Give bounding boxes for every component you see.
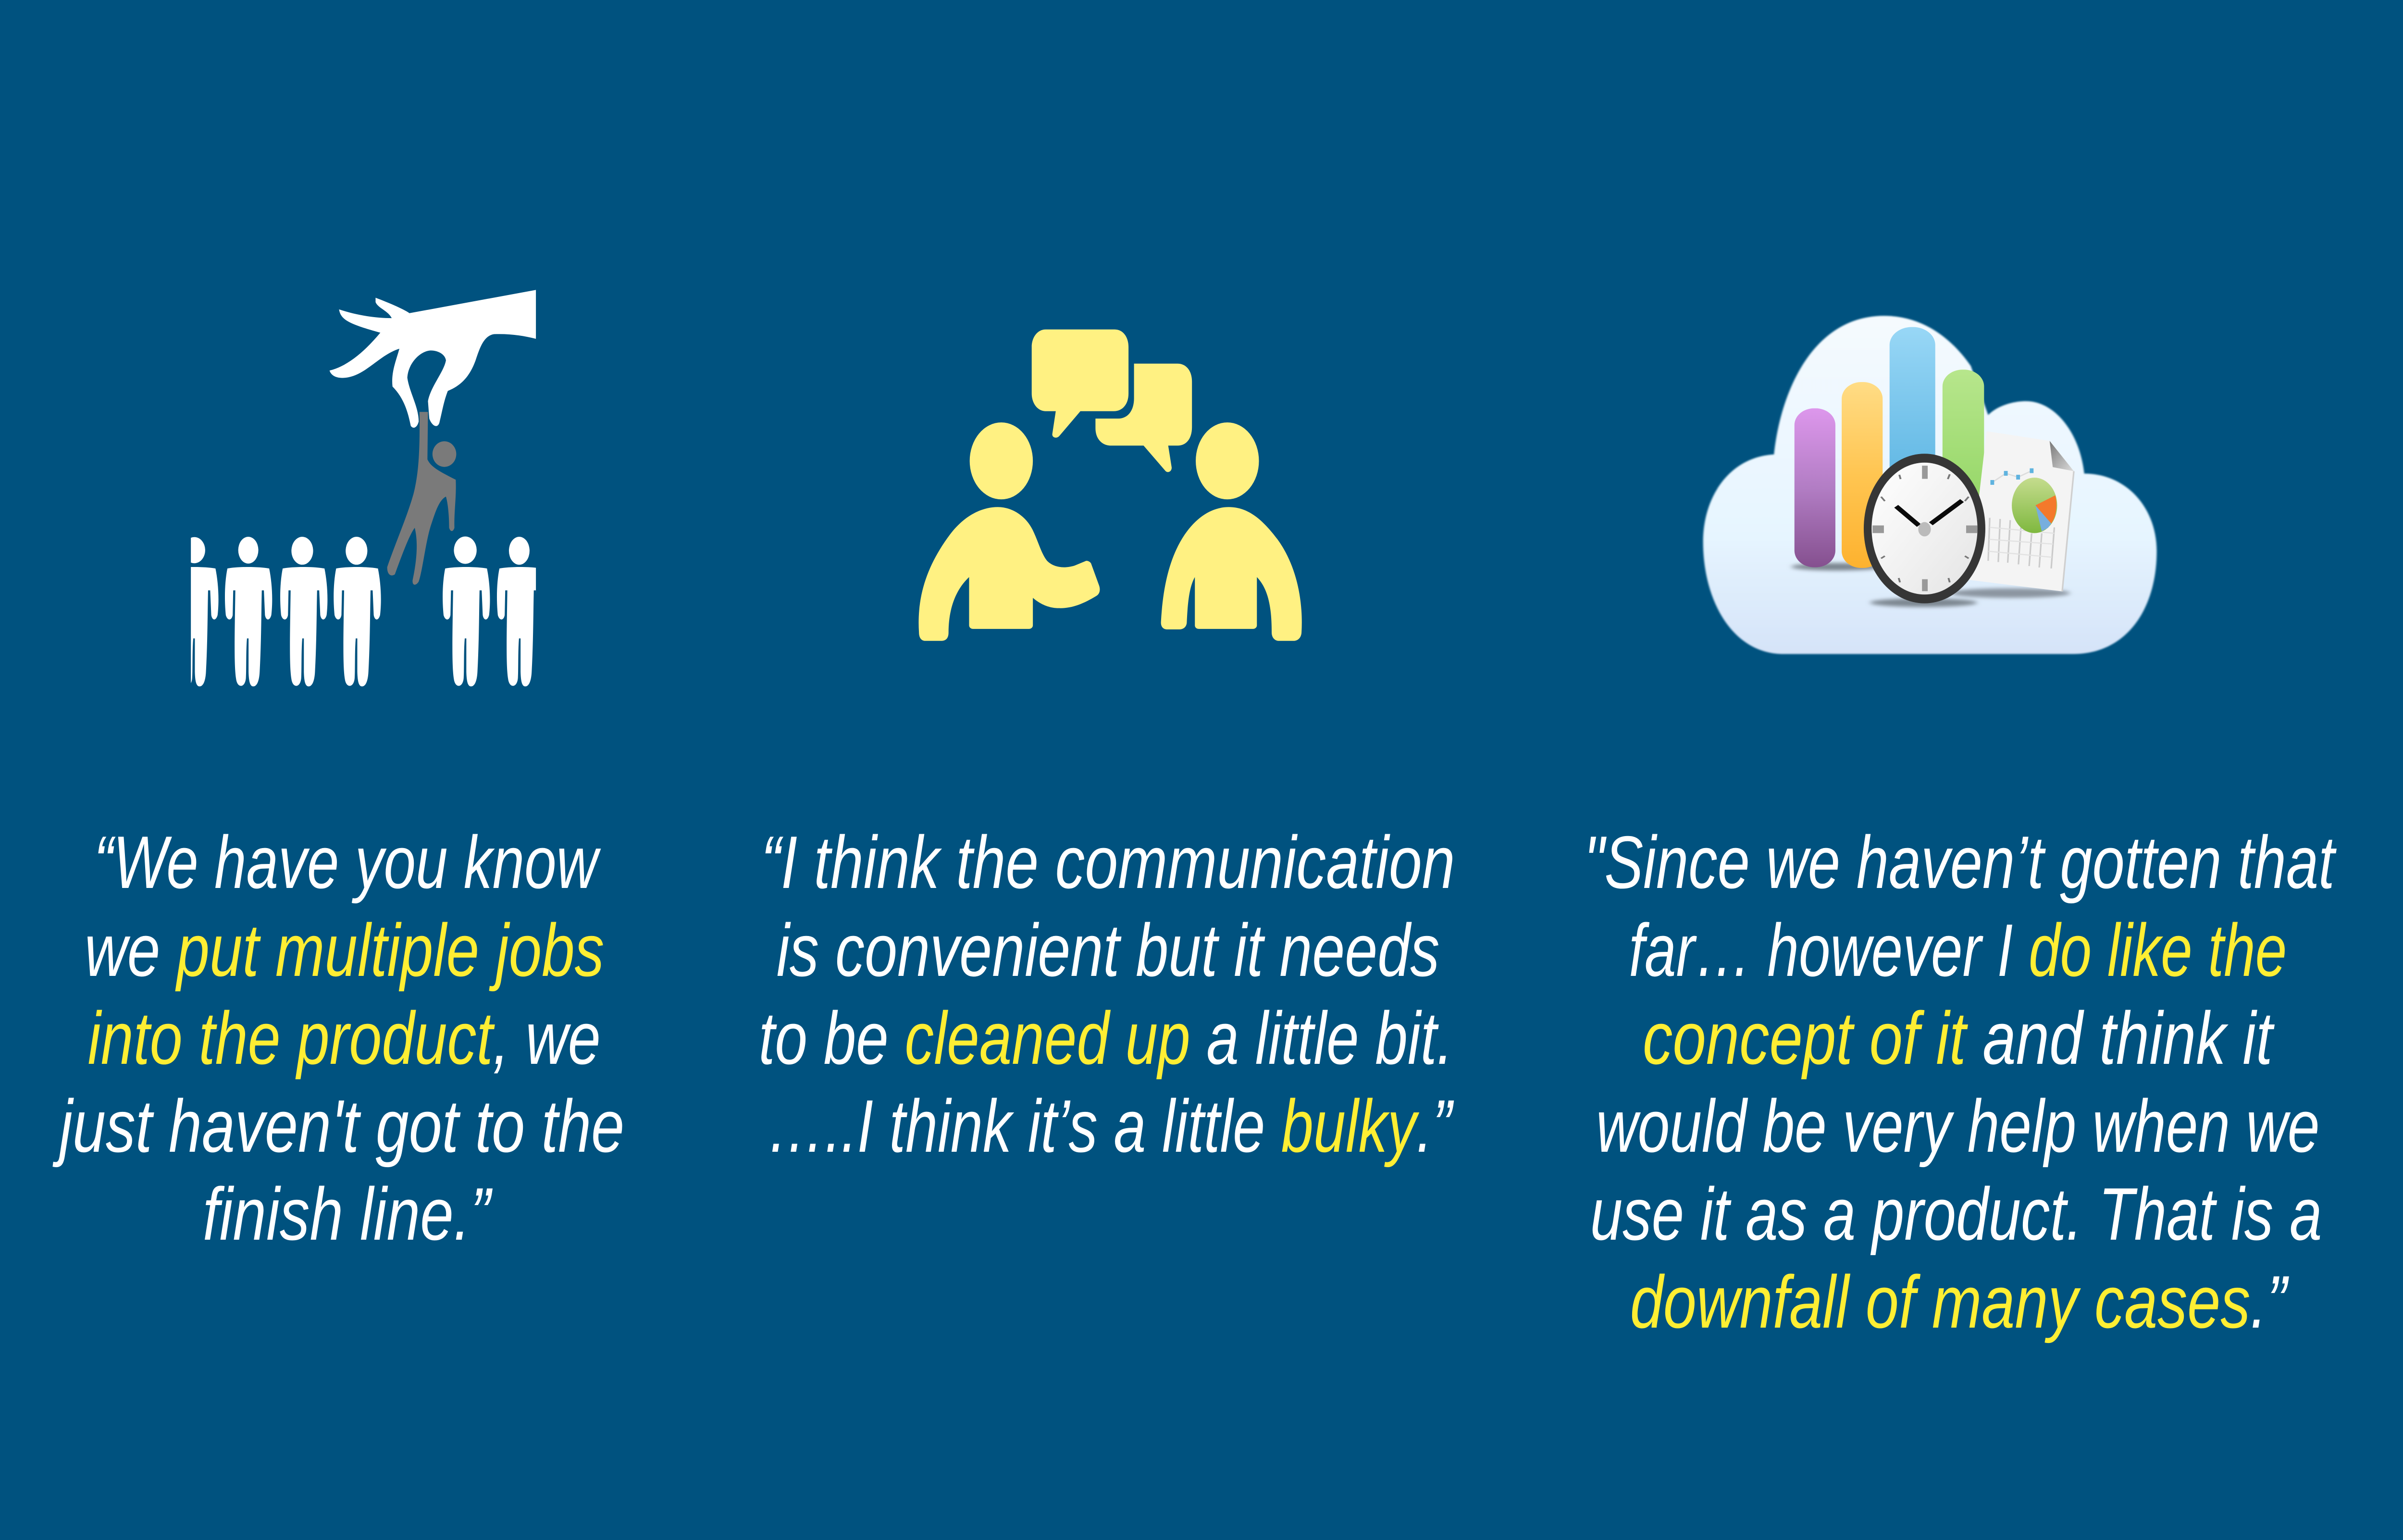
icon: right person xyxy=(1161,422,1302,641)
icon: two people talking with speech bubbles xyxy=(918,330,1302,641)
icon: report page xyxy=(1950,431,2074,598)
quote 3: "Since we haven’t gotten that xyxy=(1584,821,2337,904)
quote 3: would be very help when we xyxy=(1596,1085,2320,1168)
icon: left person xyxy=(918,422,1100,641)
quote 3: concept of it and think it xyxy=(1643,997,2275,1080)
icon: cloud with charts, clock and report xyxy=(1703,316,2157,654)
icon: report pie chart xyxy=(2012,478,2057,533)
quote 2: …..I think it’s a little bulky.” xyxy=(767,1085,1454,1168)
quote 1: just haven't got to the xyxy=(52,1085,624,1168)
quote 3: far… however I do like the xyxy=(1629,909,2287,992)
quote 2: to be cleaned up a little bit. xyxy=(759,997,1453,1080)
quote 3: use it as a product. That is a xyxy=(1590,1173,2322,1256)
quote 1 xyxy=(52,821,624,1256)
icon: orange bar xyxy=(1842,382,1883,568)
icon: clock xyxy=(1864,454,1985,607)
icon: crowd of white people xyxy=(171,537,544,687)
quote 1: finish line.” xyxy=(203,1173,493,1256)
icon: cloud xyxy=(1703,316,2157,654)
icon: green bar xyxy=(1943,370,1984,513)
quote 3: downfall of many cases.” xyxy=(1630,1261,2289,1344)
quote 2 xyxy=(759,821,1455,1168)
icon: report line chart xyxy=(1990,468,2033,485)
icon: speech bubble right xyxy=(1095,364,1192,472)
quote 2: is convenient but it needs xyxy=(777,909,1439,992)
icon: hand picking a person from a crowd xyxy=(171,290,544,687)
icon: bar shadows xyxy=(1791,563,1883,571)
quote 1: we put multiple jobs xyxy=(85,909,604,992)
icon: lifted grey person xyxy=(387,412,456,585)
quote 1: into the product, we xyxy=(88,997,601,1080)
icon: report table xyxy=(1988,518,2055,568)
icon: speech bubble left xyxy=(1032,330,1128,438)
quote 2: “I think the communication xyxy=(761,821,1455,904)
quote 1: “We have you know xyxy=(94,821,601,904)
icon: purple bar xyxy=(1795,408,1835,567)
icon: blue bar xyxy=(1890,327,1935,494)
icon: hand xyxy=(330,290,536,428)
quote 3 xyxy=(1584,821,2337,1344)
